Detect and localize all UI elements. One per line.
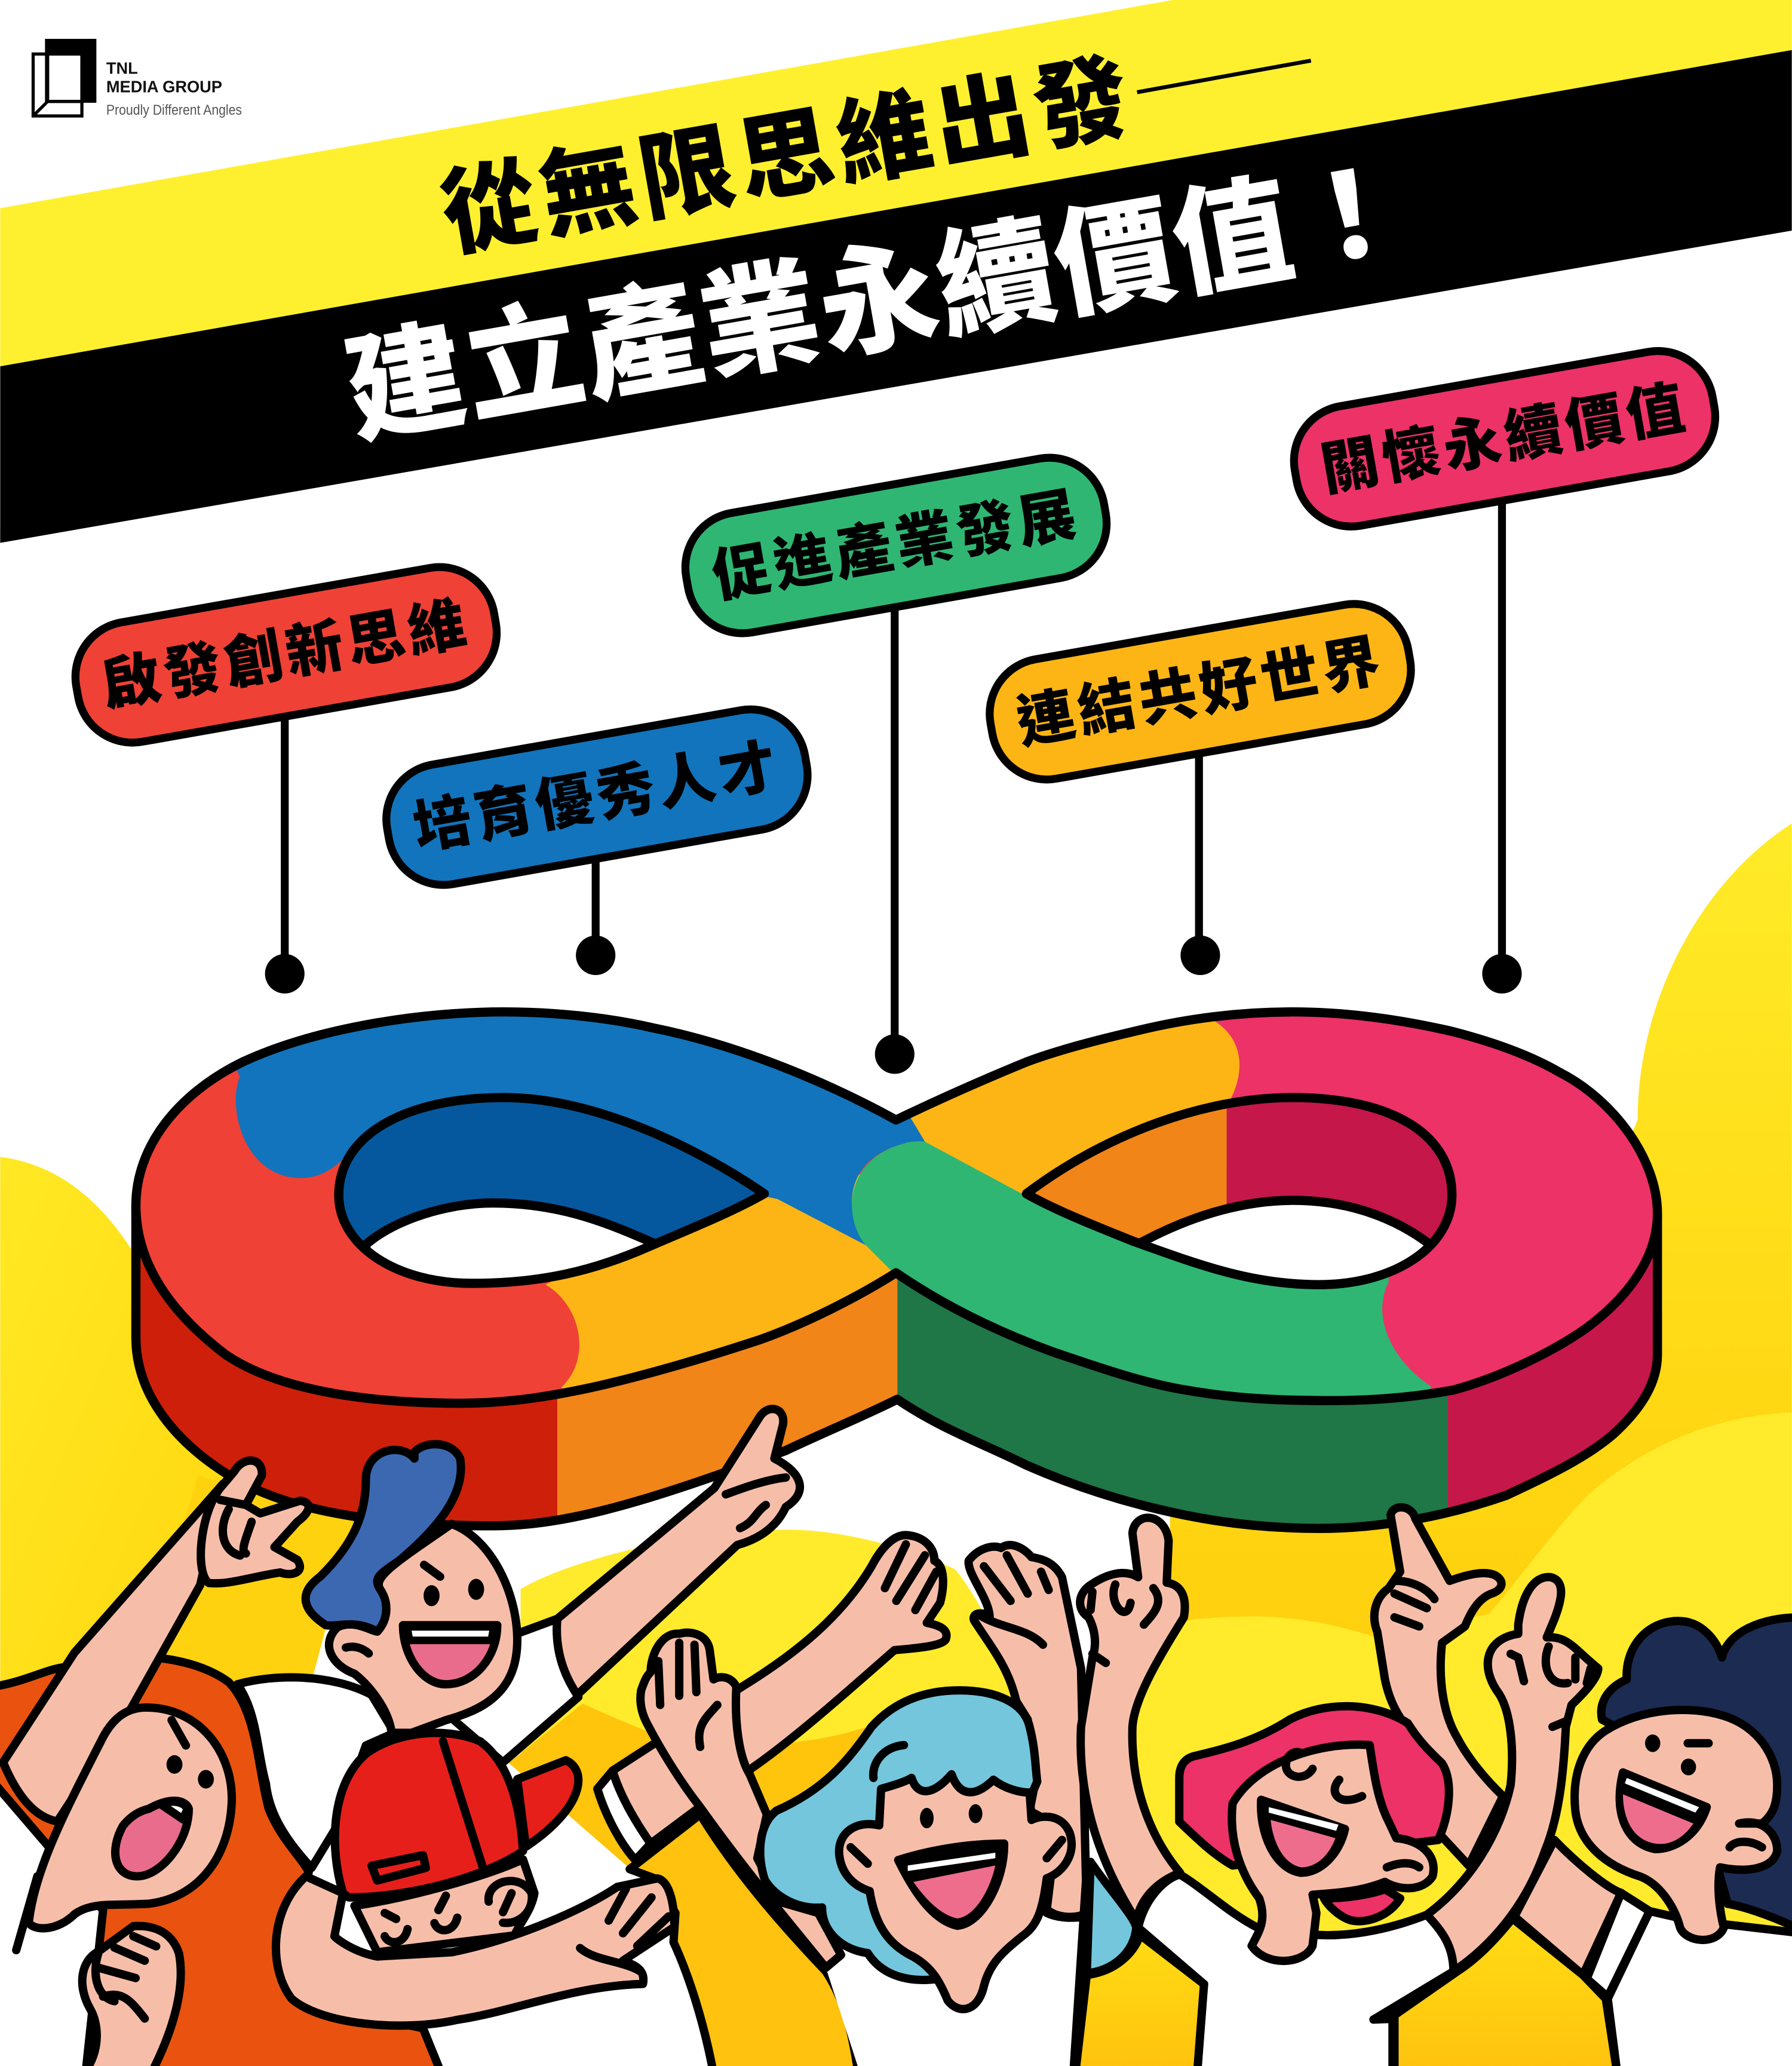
mouth bbox=[1261, 1800, 1345, 1873]
main title: 建立產業永續價值！ bbox=[331, 112, 1423, 468]
fist bbox=[82, 1926, 181, 2066]
cap crown bbox=[335, 1733, 523, 1898]
gold dress left bbox=[1075, 1935, 1204, 2066]
finger lines bbox=[220, 1500, 251, 1556]
label: 促進產業發展 bbox=[677, 449, 1115, 1074]
open mouth bbox=[115, 1801, 189, 1877]
face bbox=[329, 1524, 517, 1733]
raised arm bbox=[3, 1484, 223, 1822]
eyes bbox=[167, 1755, 182, 1774]
teeth bbox=[412, 1630, 489, 1636]
background blob: right light yellow bbox=[1107, 1412, 1792, 2003]
outline bbox=[136, 1012, 1658, 1403]
yellow stripe bbox=[0, 0, 1792, 366]
label: 培育優秀人才 bbox=[378, 701, 817, 975]
logo wordmark: TNL bbox=[106, 59, 138, 78]
raised arm G with pointing hand bbox=[1080, 1518, 1185, 1920]
reaching arm and hand bbox=[613, 1535, 947, 1844]
white shoulder bbox=[237, 1678, 394, 1868]
left hole opening bbox=[365, 1203, 655, 1304]
shoulder arm bbox=[1514, 1840, 1621, 1975]
white shirt centre bbox=[1138, 1875, 1453, 2066]
finger lines F bbox=[980, 1555, 1049, 1645]
black stripe bbox=[0, 50, 1792, 543]
blue hair bbox=[306, 1444, 461, 1632]
label: 啟發創新思維 bbox=[67, 559, 505, 994]
ear bbox=[489, 1881, 532, 1923]
eyes and mouth marks bbox=[385, 1896, 458, 1942]
people, left back group bbox=[0, 1409, 800, 2066]
teeth bbox=[161, 1802, 188, 1819]
side wall bbox=[140, 1163, 1653, 1524]
sleeve bbox=[597, 1771, 650, 1860]
white body bbox=[826, 1913, 1085, 2066]
red band bbox=[140, 1070, 887, 1399]
pink hair bbox=[1179, 1706, 1449, 1865]
label: 關懷永續價值: 關懷永續價值 bbox=[1314, 360, 1694, 507]
infinity symbol bbox=[119, 975, 1674, 1541]
raised arm with pointing hand, right bbox=[1427, 1577, 1598, 1972]
brow bbox=[171, 1720, 186, 1746]
eyes bbox=[920, 1808, 934, 1828]
finger lines bbox=[1394, 1581, 1434, 1626]
background blob: right gold bbox=[1170, 823, 1792, 2066]
person: orange hair bbox=[0, 1461, 440, 2066]
teeth bbox=[908, 1853, 995, 1871]
raised hand bbox=[201, 1461, 309, 1583]
tongue bbox=[913, 1865, 995, 1918]
white body bbox=[1607, 1911, 1792, 2066]
label: 連結共好世界: 連結共好世界 bbox=[1009, 612, 1389, 760]
body outline bbox=[1047, 1869, 1087, 2066]
collar line bbox=[1373, 2008, 1394, 2019]
face bbox=[1575, 1710, 1777, 1940]
label: 連結共好世界 bbox=[981, 595, 1420, 975]
eyes bbox=[1645, 1734, 1660, 1752]
finger lines bbox=[1511, 1647, 1591, 1727]
sleeve stripe bbox=[1587, 1893, 1650, 1997]
finger lines bbox=[726, 1478, 785, 1528]
hugging arm bbox=[276, 1877, 674, 2025]
raised arm bbox=[557, 1409, 800, 1695]
teeth bbox=[1625, 1778, 1699, 1813]
person: blue hair bbox=[306, 1409, 800, 1762]
seam bbox=[443, 1741, 483, 1868]
face bbox=[29, 1708, 232, 1928]
person: light blue hair bbox=[760, 1690, 1072, 2009]
lower lip piece bbox=[1324, 1889, 1400, 1921]
finger lines E bbox=[658, 1643, 717, 1747]
finger lines G bbox=[1091, 1584, 1158, 1663]
person: pink hair bbox=[1179, 1706, 1449, 1961]
mouth bbox=[1620, 1773, 1707, 1849]
pink band bbox=[1215, 1016, 1653, 1390]
logo bbox=[33, 39, 242, 118]
label: 培育優秀人才: 培育優秀人才 bbox=[406, 718, 786, 865]
face bbox=[839, 1774, 1072, 2009]
dark hair bbox=[1601, 1617, 1792, 1929]
right hole opening bbox=[1144, 1200, 1431, 1304]
left hole inner wall bbox=[339, 1098, 764, 1283]
people, centre group bbox=[597, 1518, 1185, 2066]
label: 促進產業發展: 促進產業發展 bbox=[705, 466, 1085, 614]
ear lines bbox=[851, 1840, 1062, 1863]
gold garment bbox=[630, 1814, 858, 2066]
orange hair and dress bbox=[0, 1656, 440, 2066]
background blob: centre gold band bbox=[509, 1697, 1028, 1871]
label: 關懷永續價值 bbox=[1285, 342, 1724, 994]
subtitle: 從無限思維出發 bbox=[429, 19, 1143, 276]
raised hand E and arm bbox=[640, 1633, 841, 1967]
teeth bbox=[1269, 1807, 1339, 1831]
pink hair person back arm bbox=[1374, 1507, 1503, 1865]
people, right group bbox=[1075, 1507, 1792, 2066]
blue band bbox=[235, 1016, 925, 1245]
person: red cap bbox=[276, 1733, 674, 2025]
logo mark bbox=[33, 39, 96, 116]
tongue bbox=[1271, 1820, 1336, 1867]
label: 啟發創新思維: 啟發創新思維 bbox=[95, 575, 475, 723]
hair curl bbox=[873, 1745, 904, 1778]
brow bbox=[1687, 1739, 1708, 1748]
strap bbox=[372, 1855, 426, 1881]
mouth bbox=[898, 1844, 1004, 1926]
white sleeve bbox=[452, 1619, 578, 1762]
background blob: centre light yellow bbox=[520, 1529, 1016, 1765]
tongue bbox=[1623, 1794, 1693, 1844]
green band bbox=[852, 1141, 1431, 1396]
person: dark hair bbox=[1514, 1617, 1792, 2066]
fist finger lines bbox=[96, 1936, 156, 2019]
brow bbox=[424, 1565, 440, 1577]
cap brim bbox=[517, 1760, 578, 1847]
logo tagline: Proudly Different Angles bbox=[106, 102, 242, 118]
mouth bbox=[403, 1625, 497, 1684]
face bbox=[1232, 1745, 1434, 1961]
cap button bbox=[375, 1735, 394, 1746]
curl and closed eye bbox=[1286, 1752, 1419, 1867]
face bbox=[354, 1859, 535, 1952]
finger lines bbox=[885, 1544, 936, 1610]
dash after subtitle bbox=[1137, 60, 1311, 92]
yellow band upper bbox=[886, 1021, 1240, 1194]
background blob: left yellow bbox=[0, 1157, 224, 1682]
logo wordmark line 2: MEDIA GROUP bbox=[106, 77, 222, 96]
background blob: left gold bbox=[79, 1476, 356, 1713]
top face colour bands bbox=[140, 1016, 1653, 1399]
eyes bbox=[424, 1585, 440, 1606]
ear line bbox=[1730, 1842, 1762, 1847]
jaw line bbox=[16, 1877, 38, 1950]
raised arm F bbox=[968, 1545, 1087, 1917]
ear line bbox=[346, 1647, 369, 1654]
back hair bbox=[1087, 1862, 1136, 1973]
gold dress right bbox=[1394, 1918, 1617, 2066]
hand finger lines bbox=[580, 1889, 668, 1971]
title banner bbox=[0, 0, 1792, 543]
right hole inner wall bbox=[1035, 1102, 1447, 1239]
teeth band bbox=[405, 1625, 496, 1644]
yellow band lower bbox=[546, 1175, 891, 1388]
hair mass bbox=[760, 1690, 1037, 1980]
